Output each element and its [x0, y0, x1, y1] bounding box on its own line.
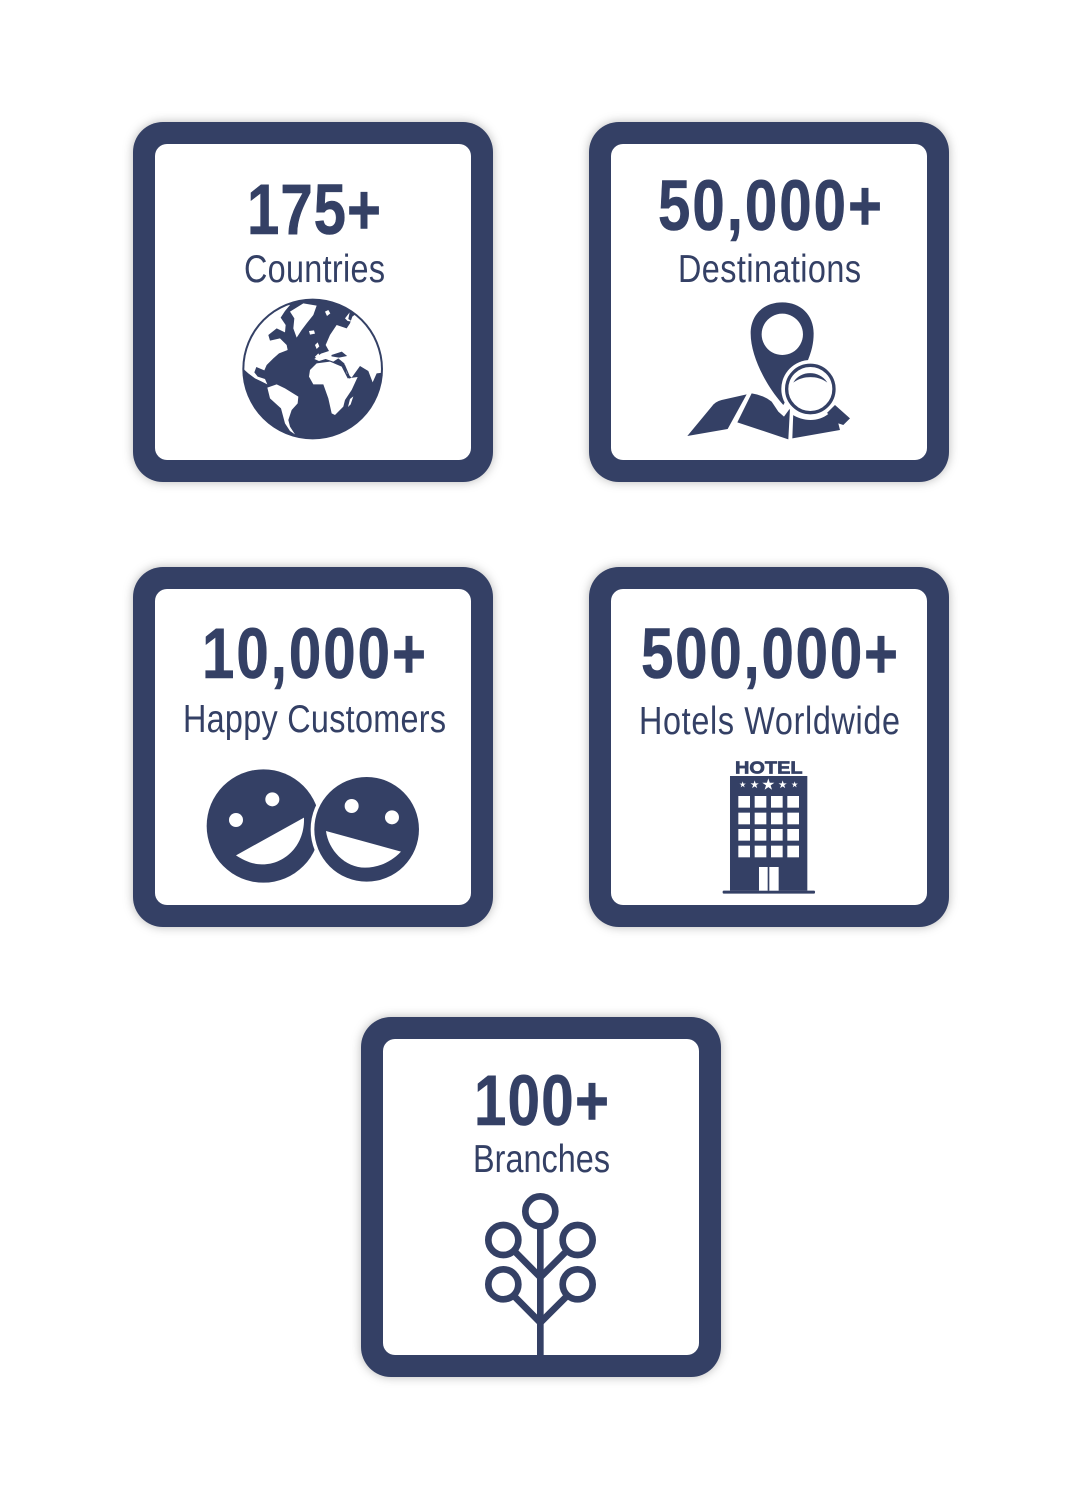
label: Hotels Worldwide: Hotels Worldwide — [639, 699, 900, 743]
icon: two smiling faces — [207, 769, 423, 885]
icon: branching tree — [488, 1196, 593, 1355]
stat: 175+: 175+ — [247, 169, 381, 249]
panel: branches — [361, 1017, 721, 1377]
icon: hotel building: HOTEL — [735, 757, 803, 777]
label: Countries: Countries — [244, 247, 385, 291]
icon: map pin with magnifier — [687, 302, 850, 439]
label: Branches: Branches — [473, 1137, 610, 1181]
stat: 50,000+: 50,000+ — [658, 165, 882, 245]
panel: hotels worldwide — [589, 567, 949, 927]
label: Destinations: Destinations — [678, 247, 861, 291]
panel: happy customers — [133, 567, 493, 927]
icon: hotel building — [723, 757, 815, 894]
panel: destinations — [589, 122, 949, 482]
stat: 10,000+: 10,000+ — [202, 613, 426, 693]
stat: 500,000+: 500,000+ — [641, 613, 898, 693]
panel: countries — [133, 122, 493, 482]
icon: globe — [242, 298, 383, 440]
stat: 100+: 100+ — [474, 1060, 609, 1140]
label: Happy Customers: Happy Customers — [183, 697, 446, 741]
